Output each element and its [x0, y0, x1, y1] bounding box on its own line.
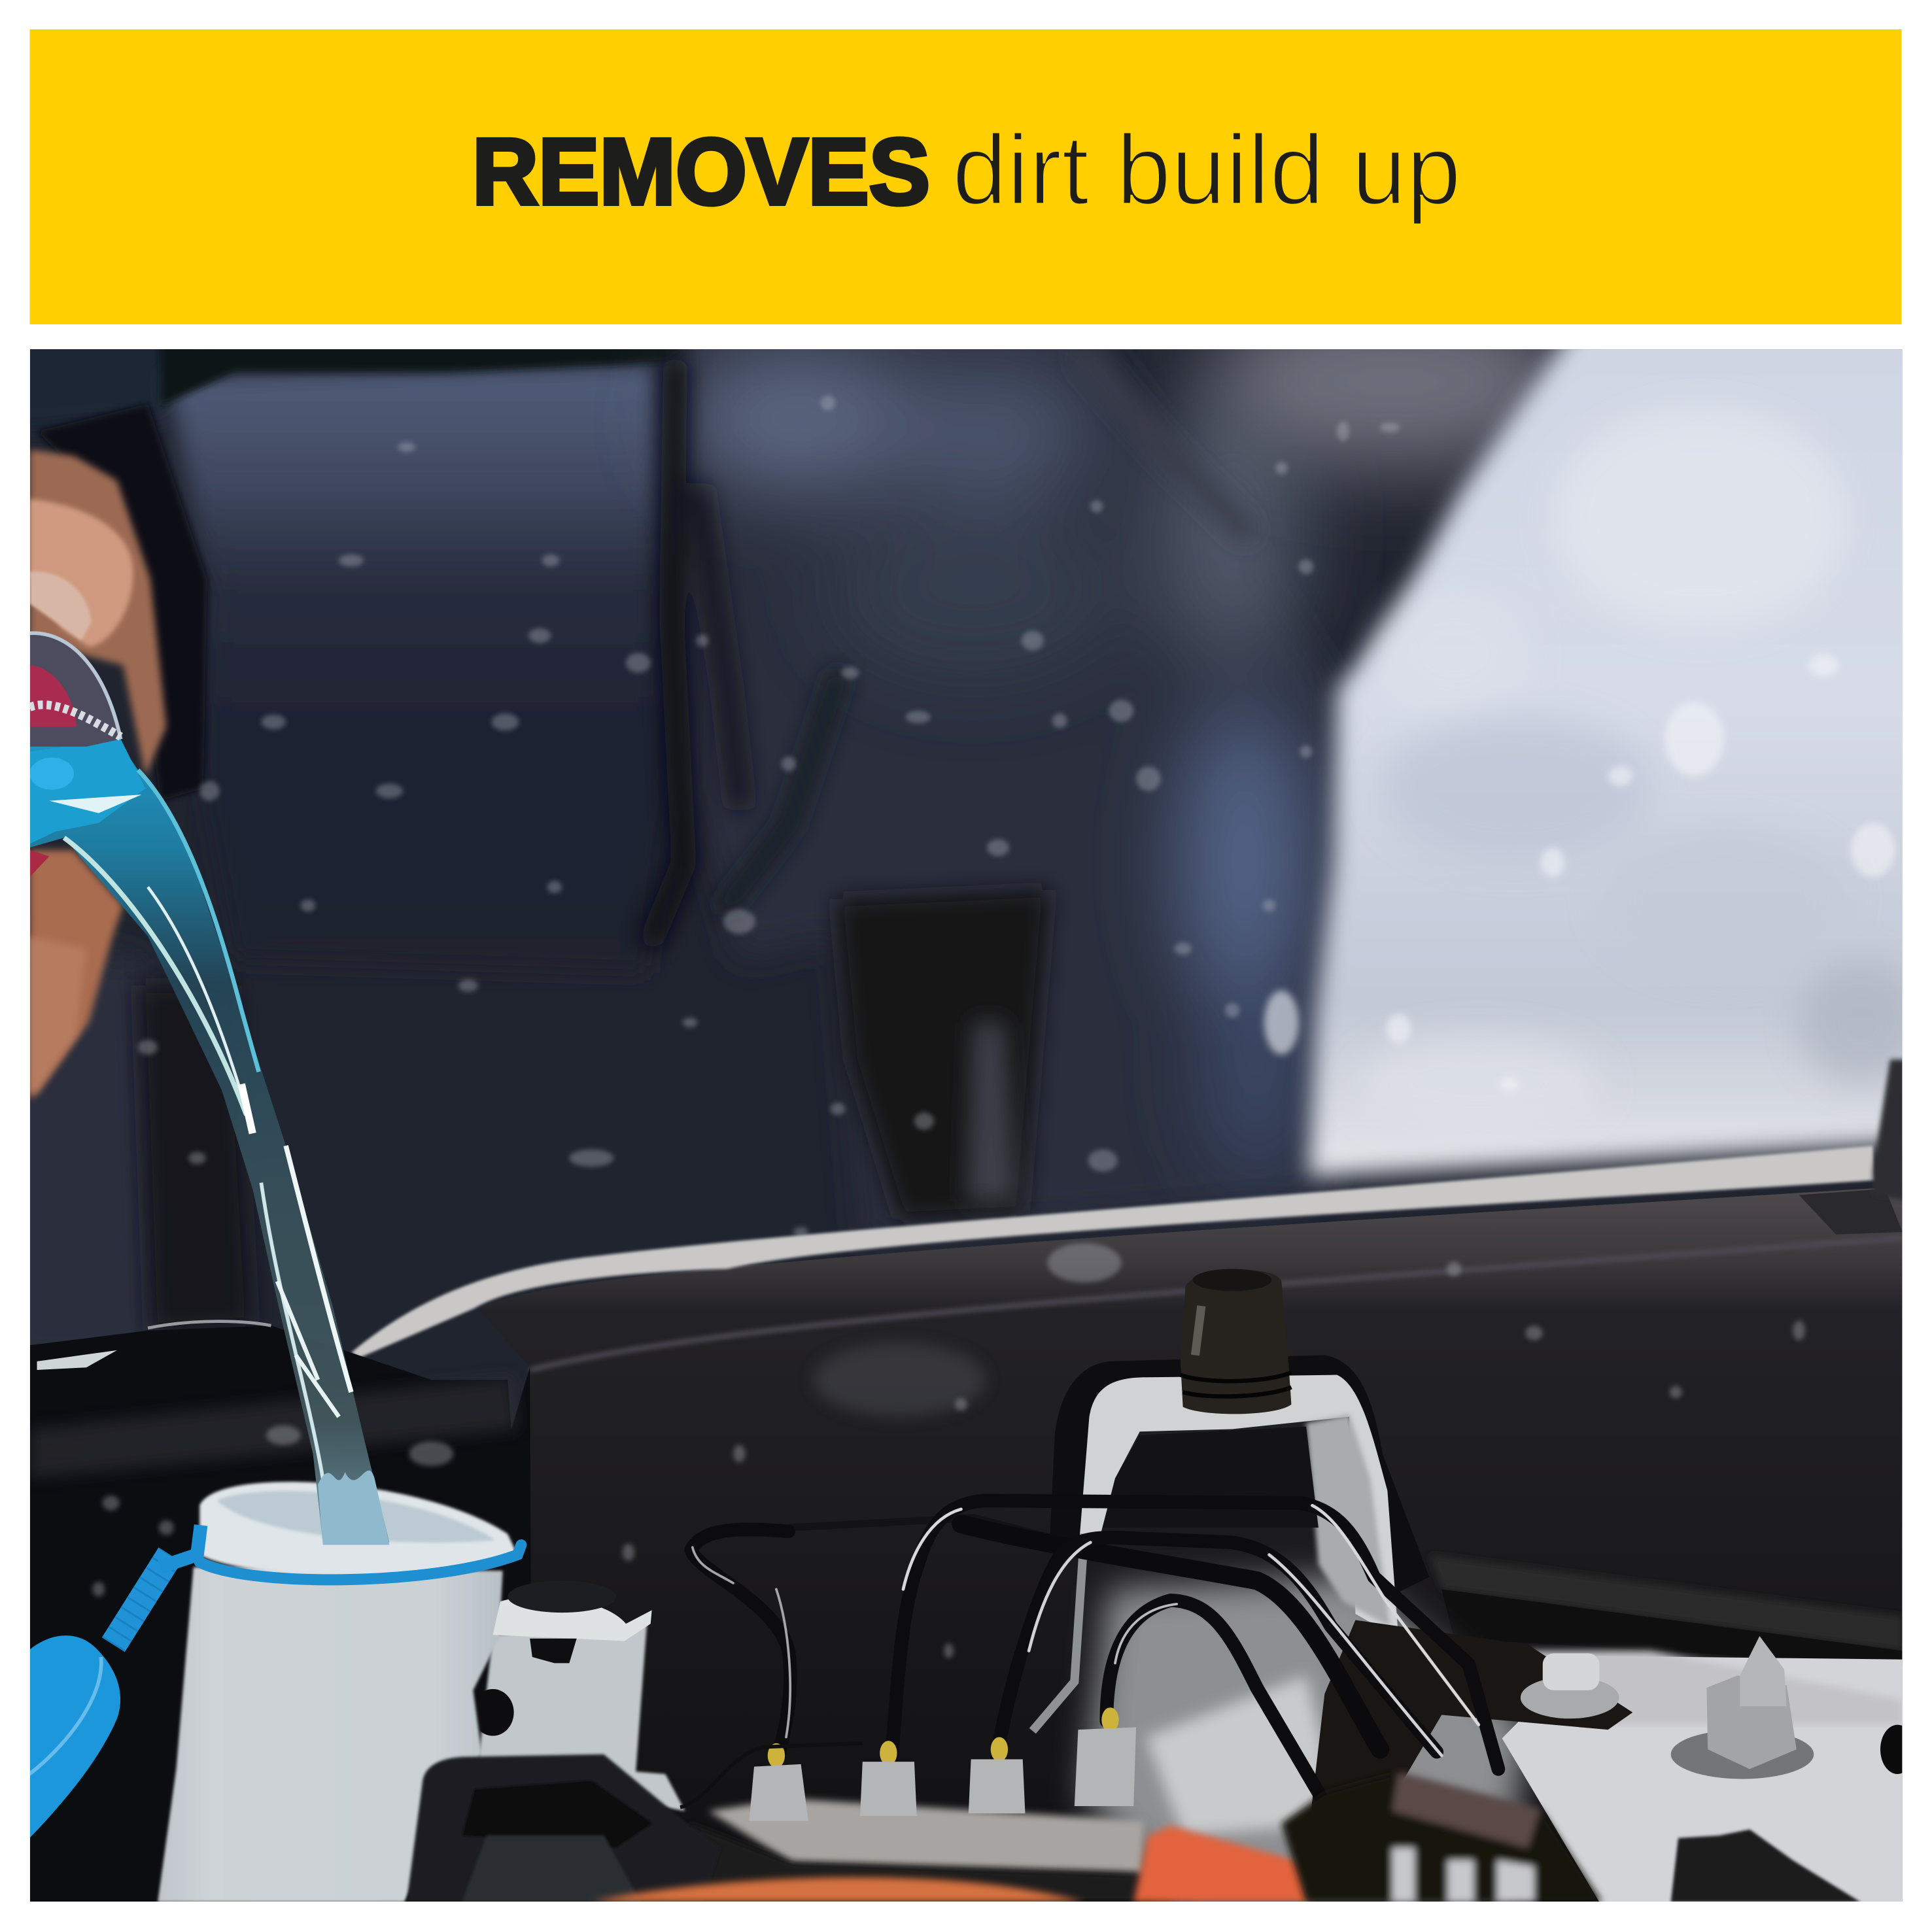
dark blurred bracket front right — [1281, 1771, 1602, 1902]
forefinger — [29, 499, 133, 647]
aluminium valve block — [708, 1799, 1143, 1873]
rear connector line — [789, 1518, 1060, 1540]
black clip — [530, 1639, 577, 1663]
top left dark corner — [30, 349, 192, 427]
glossy black left engine bay — [29, 1322, 532, 1902]
bottle neck with red label and bubbles — [29, 633, 121, 877]
heading: REMOVES dirt build up: dirt build up — [952, 114, 1461, 226]
engine bay dark cover panel — [478, 1185, 1922, 1922]
hand holding the bottle — [29, 450, 166, 1099]
hood edge white strip — [351, 1146, 1875, 1358]
shoulder grey top right — [1207, 296, 1578, 468]
jacket light patches — [678, 345, 1312, 1183]
black cuff — [37, 404, 207, 801]
fingernail — [29, 572, 91, 641]
reservoir body — [158, 1567, 503, 1902]
top shadow band — [156, 349, 693, 408]
lower left trousers — [30, 951, 149, 1354]
yellow pipe marks — [768, 1707, 1119, 1768]
stream of blue washer fluid — [29, 739, 389, 1545]
orange connector — [1133, 1826, 1311, 1902]
dark column lower left — [138, 985, 252, 1331]
lower bolt in dark recess — [1671, 1830, 1861, 1902]
thick blurred pipe — [961, 1524, 1380, 1749]
thin wire — [680, 1743, 863, 1807]
falling snow flakes — [92, 396, 1805, 1658]
bolt on bracket — [1521, 1653, 1619, 1718]
valve block underside — [653, 1823, 1146, 1902]
blurred background: person in dark jacket — [0, 296, 1578, 1367]
dark patch beneath jacket — [835, 889, 1050, 1220]
bracket plate — [493, 1597, 652, 1641]
snow tonal patches — [1355, 407, 1922, 1133]
heading: REMOVES dirt build up: REMOVES — [472, 119, 930, 224]
reservoir rim opening — [199, 1482, 517, 1575]
black arch bracket behind knob — [1050, 1355, 1429, 1601]
black grommet — [508, 1581, 616, 1613]
jacket folds — [653, 357, 1245, 936]
reservoir mount bracket — [477, 1624, 685, 1811]
blurred snow background — [1309, 320, 1932, 1176]
pipe 1 — [691, 1529, 790, 1766]
pipe 2 — [891, 1501, 1498, 1769]
black plastic connector — [407, 1754, 721, 1902]
blue ring — [199, 1545, 521, 1580]
banner: yellow headline panel — [30, 29, 1902, 324]
black rubber knob — [1181, 1269, 1291, 1414]
dark pillar at right edge — [1873, 1059, 1910, 1201]
jacket sleeve — [162, 362, 663, 681]
bracket hole — [472, 1689, 514, 1736]
pale strut in shadow — [967, 1023, 1016, 1201]
metal brake pipes — [691, 1501, 1498, 1813]
pipe 3 — [997, 1537, 1441, 1760]
orange tube — [591, 1877, 1084, 1902]
back of hand — [29, 450, 166, 776]
blue cap — [29, 1635, 120, 1838]
lower fingers — [29, 850, 123, 1099]
silver fittings — [749, 1727, 1136, 1821]
reservoir inside — [217, 1491, 495, 1543]
pipe 4 — [1107, 1600, 1331, 1813]
dark metal bolt bracket — [1311, 1620, 1632, 1811]
gray strut and engine block surfaces — [1084, 1577, 1915, 1902]
washer fluid reservoir — [29, 1482, 685, 1902]
snow flakes over bright background — [1264, 654, 1895, 1091]
large silver bolt — [1671, 1636, 1814, 1779]
white arch bracket — [1033, 1375, 1398, 1731]
blue strap — [113, 1525, 201, 1645]
jacket torso — [690, 320, 1337, 1244]
